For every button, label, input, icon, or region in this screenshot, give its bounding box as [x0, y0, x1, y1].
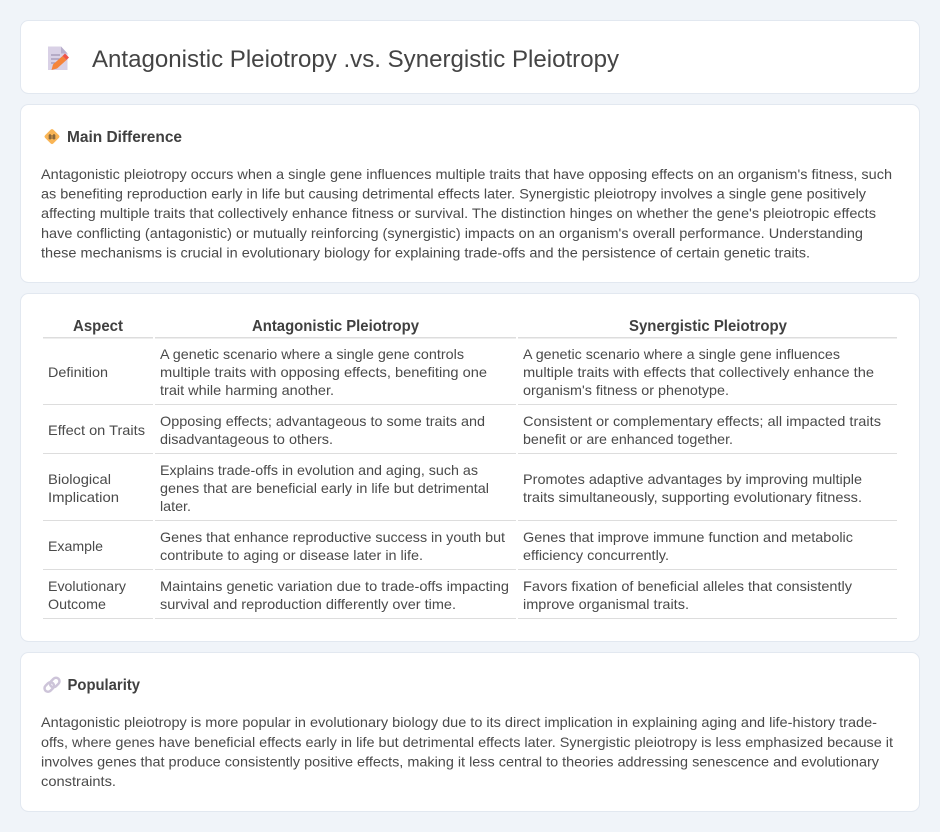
table row: effect on traits: benefit or are enhanced together.	[523, 431, 733, 447]
title: Antagonistic Pleiotropy .vs. Synergistic Pleiotropy	[92, 46, 619, 73]
table row: evolutionary outcome: Evolutionary	[48, 578, 126, 594]
panel: title header	[20, 20, 920, 94]
table header row	[43, 318, 897, 338]
table row: evolutionary outcome: Maintains genetic variation due to trade-offs impacting	[160, 578, 509, 594]
panel: comparison table	[20, 294, 920, 642]
table row: effect on traits: Opposing effects; advantageous to some traits and	[160, 413, 485, 429]
heading: popularity: Popularity	[68, 677, 140, 694]
icon: warning diamond	[44, 128, 60, 145]
table row: evolutionary outcome: Outcome	[48, 596, 106, 612]
table row: evolutionary outcome: Favors fixation of beneficial alleles that consistently	[523, 578, 852, 594]
table row: biological implication: later.	[160, 498, 191, 514]
table header row: Aspect	[73, 318, 123, 335]
text block: popularity paragraph: involves genes that produce consistently positive effects, making it less central to theories addressing senescence and evolutionary	[41, 753, 879, 769]
table row: definition: A genetic scenario where a single gene controls	[160, 346, 464, 362]
table row: definition: trait while harming another.	[160, 382, 334, 398]
table header row: Synergistic Pleiotropy	[629, 318, 787, 335]
table row: example: Genes that improve immune function and metabolic	[523, 529, 853, 545]
table row: example: contribute to aging or disease later in life.	[160, 547, 423, 563]
table row: biological implication	[43, 462, 897, 521]
table row: evolutionary outcome: improve organismal traits.	[523, 596, 689, 612]
table row: definition	[43, 346, 897, 405]
text block: popularity paragraph: Antagonistic pleiotropy is more popular in evolutionary biology due to its direct implication in explaining aging and life-history trade-	[41, 714, 877, 730]
text block: main difference paragraph: as benefiting reproduction early in life but causing detrimental effects later. Synergistic pleiotropy involves a single gene positively	[41, 186, 866, 202]
table row: example: Example	[48, 538, 103, 554]
table row: biological implication: genes that are beneficial early in life but detrimental	[160, 480, 489, 496]
panel: main difference	[20, 104, 920, 282]
table row: definition: multiple traits with opposing effects, benefiting one	[160, 364, 487, 380]
table row: biological implication: Implication	[48, 489, 119, 505]
table row: biological implication: Biological	[48, 471, 111, 487]
icon: chain link	[43, 676, 61, 693]
table row: evolutionary outcome	[43, 578, 897, 619]
table row: example: Genes that enhance reproductive success in youth but	[160, 529, 505, 545]
table row: evolutionary outcome: survival and reproduction differently over time.	[160, 596, 456, 612]
text block: main difference paragraph: affecting multiple traits that collectively enhance fitness or survival. The distinction hinges on whether the gene's pleiotropic effects	[41, 205, 876, 221]
table row: definition: Definition	[48, 364, 108, 380]
table row: effect on traits: Consistent or complementary effects; all impacted traits	[523, 413, 881, 429]
panel: popularity	[20, 652, 920, 812]
text block: main difference paragraph: have conflicting (antagonistic) or mutually reinforcing (synergistic) impacts on an organism's overall performance. Understanding	[41, 225, 863, 241]
table row: example: efficiency concurrently.	[523, 547, 669, 563]
table row: definition: organism's fitness or phenotype.	[523, 382, 729, 398]
table row: biological implication: Promotes adaptive advantages by improving multiple	[523, 471, 862, 487]
text block: popularity paragraph: constraints.	[41, 773, 116, 789]
table row: example	[43, 529, 897, 570]
text block: popularity paragraph	[41, 714, 893, 789]
table row: effect on traits: Effect on Traits	[48, 422, 145, 438]
table row: effect on traits: disadvantageous to others.	[160, 431, 333, 447]
text block: popularity paragraph: offs, where genes have beneficial effects early in life but detrimental effects later. Synergistic pleiotropy is less emphasized because it	[41, 734, 893, 750]
table row: biological implication: Explains trade-offs in evolution and aging, such as	[160, 462, 478, 478]
table header row: Antagonistic Pleiotropy	[252, 318, 419, 335]
table row: biological implication: traits simultaneously, supporting evolutionary fitness.	[523, 489, 862, 505]
text block: main difference paragraph: Antagonistic pleiotropy occurs when a single gene influences multiple traits that have opposing effects on an organism's fitness, such	[41, 166, 892, 182]
table row: definition: multiple traits with effects that collectively enhance the	[523, 364, 874, 380]
text block: main difference paragraph	[41, 166, 892, 260]
table row: effect on traits	[43, 413, 897, 454]
table row: definition: A genetic scenario where a single gene influences	[523, 346, 840, 362]
heading: main difference: Main Difference	[67, 129, 182, 146]
icon: document with pencil	[48, 46, 69, 70]
text block: main difference paragraph: these mechanisms is crucial in evolutionary biology for explaining trade-offs and the persistence of certain genetic traits.	[41, 244, 810, 260]
